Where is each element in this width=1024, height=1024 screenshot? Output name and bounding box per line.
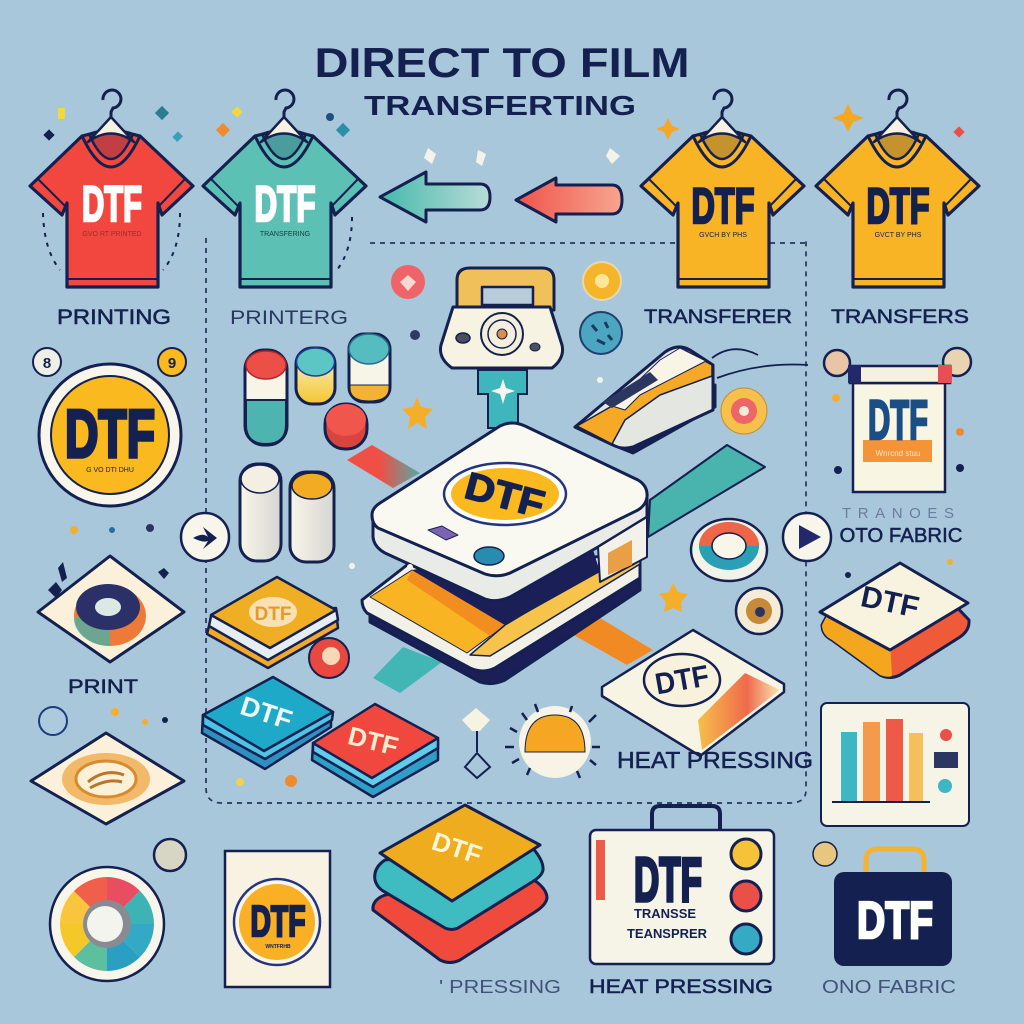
- hanging DTF poster: DTF: [868, 388, 928, 451]
- icon: color wheel: [50, 867, 164, 981]
- label: transfers: TRANSFERS: [831, 307, 969, 328]
- heat press machine: DTF: [460, 465, 549, 527]
- title: [314, 39, 690, 121]
- DTF film stack: blue: DTF: [237, 691, 296, 735]
- heated sheet: [602, 630, 784, 756]
- DTF film stack: bottom large: [373, 805, 547, 962]
- dashed process frame: [206, 238, 806, 803]
- heat press machine: [362, 423, 647, 684]
- badge: DTF yellow circle: 9: [168, 355, 176, 372]
- heat pressing case: DTF: [634, 846, 702, 915]
- disc icon: [691, 519, 767, 581]
- DTF film stack: blue: [202, 677, 333, 769]
- badge: DTF yellow circle: [33, 348, 186, 506]
- badge: DTF yellow circle: DTF: [65, 396, 155, 472]
- icon: small round badge upper: [39, 707, 67, 735]
- top press device: [440, 268, 563, 368]
- red ink ribbon: [347, 445, 420, 488]
- icon: DTF poster: WNTFRHB: [265, 944, 291, 950]
- arrow: red left: [516, 178, 622, 222]
- DTF film stack: red: [312, 704, 438, 797]
- t-shirt: printing red: GVO RT PRINTED: [82, 231, 142, 238]
- arrow: teal left: [380, 172, 490, 222]
- star upper: [402, 397, 433, 429]
- confetti sparkles: [43, 104, 965, 787]
- icon: sheet with DTF oval: [31, 733, 184, 824]
- red gem icon: [391, 265, 425, 299]
- label: heat pressing middle: HEAT PRESSING: [617, 747, 813, 773]
- label: printerg: PRINTERG: [230, 308, 348, 329]
- DTF film stack: right: DTF: [858, 580, 922, 625]
- t-shirt: transfers yellow: DTF: [866, 178, 930, 234]
- pin tag icon: [462, 708, 490, 778]
- label: transferer: TRANSFERER: [644, 307, 792, 328]
- DTF bag: [834, 849, 952, 966]
- icon: DTF poster: [225, 851, 330, 987]
- small teal ribbon: [373, 647, 442, 693]
- t-shirt: printing teal: [203, 90, 366, 287]
- star: [659, 583, 688, 612]
- hanging DTF poster: [824, 348, 971, 492]
- small yellow coin near bag: [813, 842, 837, 866]
- badge: DTF yellow circle: G VO DTI DHU: [86, 467, 134, 474]
- target icon: [721, 388, 767, 434]
- icon: DTF poster: DTF: [250, 897, 306, 946]
- t-shirt: printing red: [30, 90, 193, 287]
- label: transfer onto fabric: TRANOES: [842, 505, 954, 522]
- badge: DTF yellow circle: 8: [43, 355, 51, 372]
- heat pressing case: [590, 806, 774, 964]
- arrow button: right right side: [783, 513, 831, 561]
- sun icon: [505, 704, 600, 778]
- heat pressing case: TRANSSE: [634, 906, 696, 921]
- DTF film stack: bottom large: DTF: [428, 826, 486, 870]
- t-shirt: transferer yellow: [641, 90, 804, 287]
- t-shirt: transferer yellow: GVCH BY PHS: [699, 232, 747, 239]
- heated sheet: DTF: [653, 660, 712, 701]
- device cords: [712, 349, 808, 378]
- film rolls: [240, 464, 334, 562]
- connector ribbons: [478, 370, 765, 665]
- t-shirt: printing teal: DTF: [254, 176, 316, 232]
- label: print: PRINT: [68, 677, 138, 698]
- DTF bag: DTF: [857, 892, 933, 950]
- DTF film stack: right: [820, 563, 969, 678]
- DTF film stack: yellow: [207, 577, 338, 668]
- heat pressing case: TEANSPRER: [627, 926, 708, 941]
- DTF film stack: yellow: DTF: [255, 604, 291, 625]
- t-shirt: printing red: DTF: [82, 176, 142, 232]
- yellow coin icon: [583, 262, 621, 300]
- label: heat pressing bottom: HEAT PRESSING: [589, 977, 773, 998]
- t-shirt: transfers yellow: GVCT BY PHS: [875, 232, 922, 239]
- icon: small round badge: [154, 839, 186, 871]
- teal coin icon: [580, 312, 622, 354]
- label: ono fabric: ONO FABRIC: [822, 977, 956, 997]
- t-shirt: transferer yellow: DTF: [692, 178, 754, 234]
- label: transfer onto fabric: OTO FABRIC: [840, 525, 962, 547]
- red swirl button: [309, 638, 349, 678]
- label: pressing: ' PRESSING: [439, 977, 561, 997]
- t-shirt: transfers yellow: [816, 90, 979, 287]
- title: DIRECT TO FILM: [314, 39, 690, 86]
- arrow button: right left side: [181, 513, 229, 561]
- DTF film stack: red: DTF: [345, 720, 401, 762]
- handheld printer device: [575, 347, 715, 453]
- label: printing: PRINTING: [57, 306, 171, 329]
- ink bottles: [245, 334, 390, 449]
- icon: print sheet with disc: [38, 556, 184, 662]
- hanging DTF poster: Wnrcnd stuu: [876, 449, 920, 458]
- small coin icon: [736, 588, 782, 634]
- label: transfer onto fabric: [840, 505, 962, 547]
- bar chart panel: [821, 703, 969, 826]
- title: TRANSFERTING: [364, 90, 636, 121]
- t-shirt: printing teal: TRANSFERING: [260, 231, 310, 238]
